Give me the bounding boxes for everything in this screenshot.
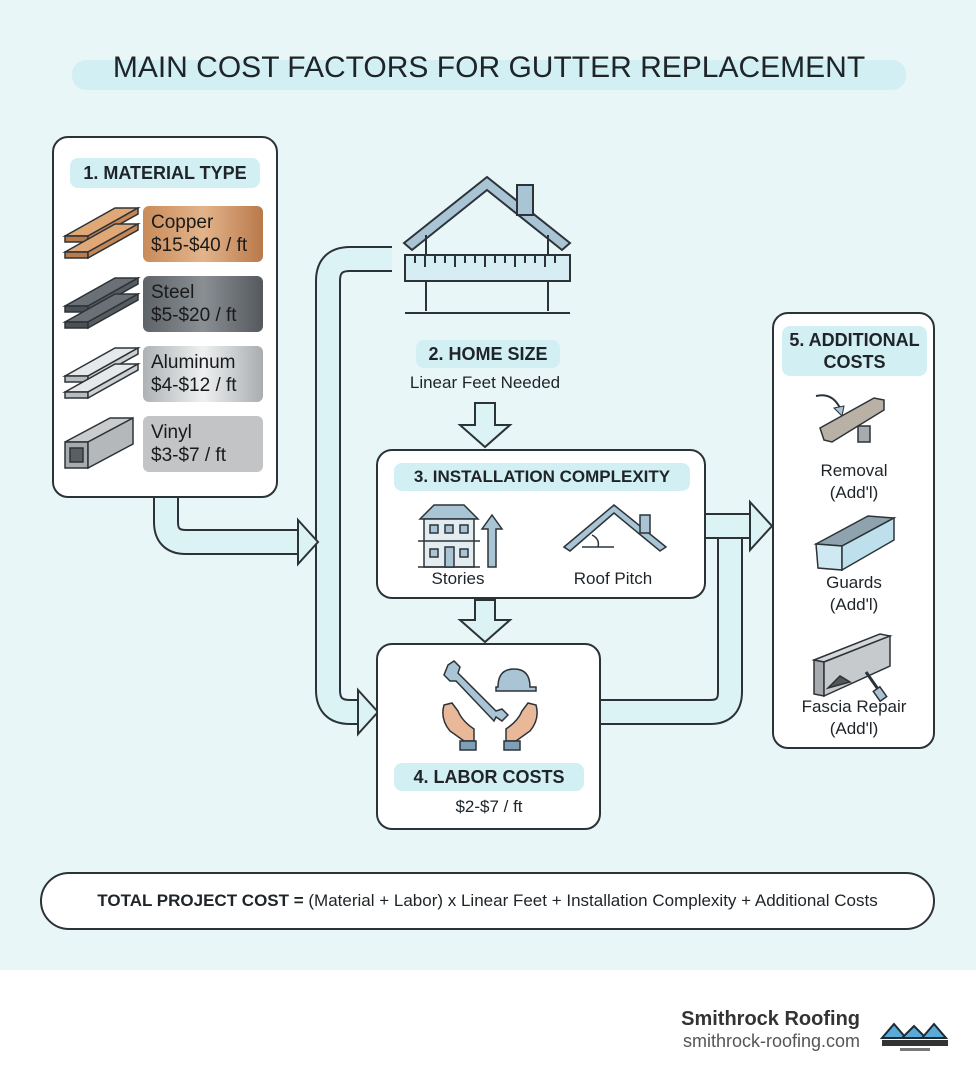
bar: steel: Steel <box>151 282 194 303</box>
panel: material type <box>52 136 278 498</box>
label: roof pitch: Roof Pitch <box>574 569 652 588</box>
label: removal: Removal <box>820 461 888 480</box>
heading: home size: 2. HOME SIZE <box>428 344 548 364</box>
text: labor price: $2-$7 / ft <box>455 797 523 816</box>
bar: copper <box>143 206 263 262</box>
bar: aluminum: Aluminum <box>151 352 235 373</box>
label: guards: Guards <box>826 573 882 592</box>
heading: material type <box>70 158 260 188</box>
panel: labor costs <box>376 643 601 830</box>
heading: 5. ADDITIONAL <box>789 330 920 350</box>
heading: labor costs: 4. LABOR COSTS <box>413 767 564 787</box>
label: removal: (Add'l) <box>830 483 878 502</box>
heading <box>394 463 690 491</box>
footer brand <box>681 1008 860 1051</box>
bar: aluminum: $4-$12 / ft <box>151 375 237 396</box>
icon: guards <box>814 515 896 572</box>
bar: vinyl: $3-$7 / ft <box>151 445 226 466</box>
title: MAIN COST FACTORS FOR GUTTER REPLACEMENT <box>113 51 865 84</box>
heading: material type: 1. MATERIAL TYPE <box>83 163 247 183</box>
text: linear feet: Linear Feet Needed <box>410 373 560 392</box>
footer brand: Smithrock Roofing <box>681 1008 860 1030</box>
heading: home size <box>416 340 560 368</box>
heading <box>782 326 927 376</box>
bar: vinyl: Vinyl <box>151 422 192 443</box>
bar: copper: $15-$40 / ft <box>151 235 247 256</box>
bar: aluminum <box>143 346 263 402</box>
label: guards <box>826 573 882 614</box>
bar: steel <box>143 276 263 332</box>
icon: roof pitch <box>562 504 668 552</box>
heading: labor costs <box>394 763 584 791</box>
label: fascia repair <box>802 697 906 738</box>
label: fascia repair: Fascia Repair <box>802 697 906 716</box>
total formula: TOTAL PROJECT COST = (Material + Labor) x Linear Feet + Installation Complexity + Additional Costs <box>97 891 878 910</box>
icon: stories <box>418 504 504 568</box>
icon: wrench helmet hands <box>442 660 538 751</box>
heading: 3. INSTALLATION COMPLEXITY <box>414 467 670 486</box>
label: removal <box>820 461 888 502</box>
panel: additional costs <box>772 312 935 749</box>
heading: COSTS <box>823 352 886 372</box>
bar: steel: $5-$20 / ft <box>151 305 237 326</box>
icon: fascia repair <box>812 633 892 702</box>
total formula <box>40 872 935 930</box>
label: stories: Stories <box>432 569 484 588</box>
label: fascia repair: (Add'l) <box>830 719 878 738</box>
panel: installation complexity <box>376 449 706 599</box>
label: guards: (Add'l) <box>830 595 878 614</box>
footer brand: smithrock-roofing.com <box>683 1031 860 1051</box>
bar: vinyl <box>143 416 263 472</box>
icon: house with ruler <box>402 176 572 314</box>
icon: logo <box>880 1022 948 1051</box>
bar: copper: Copper <box>151 212 213 233</box>
icon: removal <box>816 394 885 443</box>
icons: material sheets <box>62 206 141 470</box>
